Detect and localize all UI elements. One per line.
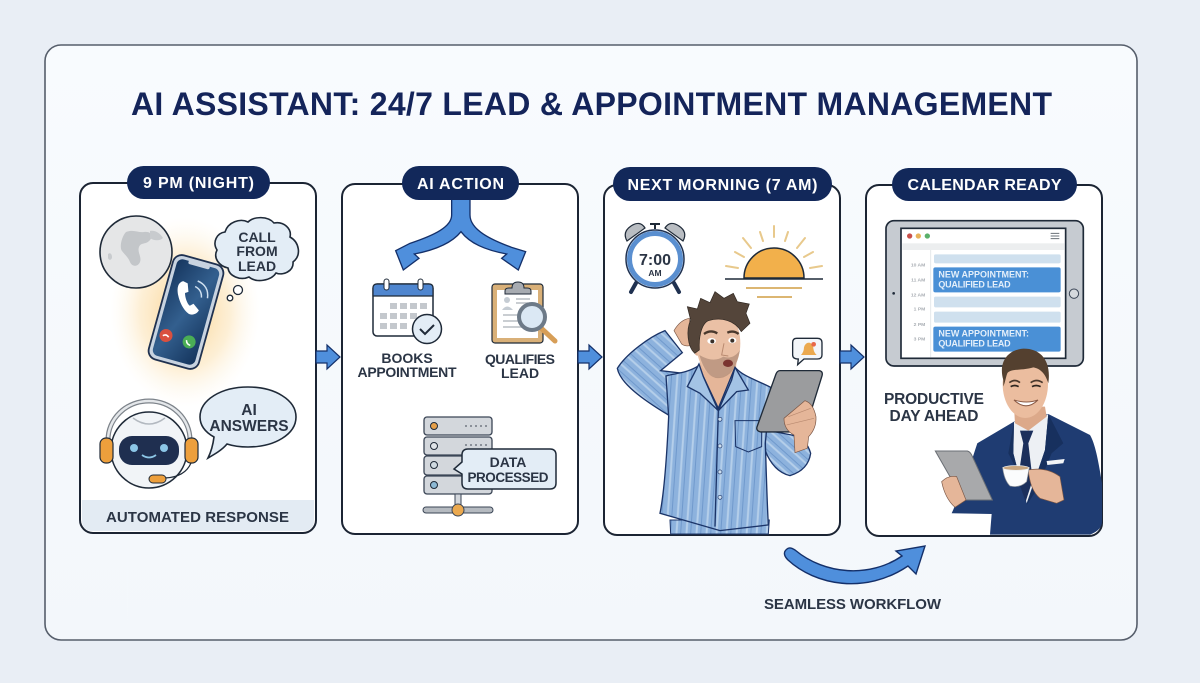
icon: smartphone [147,253,225,371]
footer band: automated response: AUTOMATED RESPONSE [106,509,289,526]
head [1003,350,1048,418]
face [1009,380,1043,406]
ears [694,341,701,356]
pill heading: calendar ready: CALENDAR READY [908,177,1062,194]
arrow: step 2 to 3 [578,345,602,369]
label: qualifies lead: LEAD [501,365,539,381]
label: productive day ahead: PRODUCTIVE [884,391,984,408]
callout: call from lead: CALL [238,229,276,245]
illustration: tablet calendar [886,221,1083,366]
footer band: automated response [82,500,314,531]
hair [1002,349,1049,387]
illustration: tablet calendar: 11 AM [911,277,925,283]
icon: robot with headset [100,401,198,488]
cup [1003,467,1029,487]
illustration: tablet calendar: NEW APPOINTMENT: [938,329,1029,339]
right arm [765,430,811,476]
notification bubble [793,338,822,365]
tie [1018,431,1033,502]
label: productive day ahead [884,391,984,425]
suit [952,414,1102,535]
tablet hand [942,476,966,507]
title: AI ASSISTANT: 24/7 LEAD & APPOINTMENT MANAGEMENT [131,86,1052,122]
arrow: step 1 to 2 [316,345,340,369]
cup hand arm [1028,469,1064,503]
trousers [670,520,769,534]
arrow: step 3 to 4 [840,345,864,369]
label: books appointment: APPOINTMENT [358,364,457,380]
lapels [1008,414,1063,505]
illustration: tablet calendar: 1 PM [914,307,925,313]
main card [45,45,1137,640]
neck [1014,407,1047,431]
label: qualifies lead [485,351,555,381]
icon: phone glow [110,217,260,407]
icon: sunrise [725,226,823,297]
illustration: tablet calendar: NEW APPOINTMENT: [938,270,1029,280]
pill heading: AI action: AI ACTION [417,176,504,193]
panel: calendar ready [866,168,1102,536]
pocket [735,421,762,452]
callout: call from lead: FROM [236,243,278,259]
placket [715,411,718,527]
illustration: tablet calendar: 2 PM [914,322,925,328]
pill heading: 9 PM (night) [127,166,270,199]
callout: AI answers [200,387,296,458]
icon: clipboard with magnifier [492,282,555,343]
callout: data processed: PROCESSED [468,470,549,485]
tablet [935,451,992,500]
panel: 9 PM night [80,166,316,533]
shirt and collar [1013,414,1048,503]
arrow: branching action arrow [396,198,526,270]
icon: alarm clock [625,223,685,292]
callout: data processed [454,449,556,489]
illustration: smiling businessman [935,349,1102,535]
tablet [757,371,822,432]
pill heading: next morning: NEXT MORNING (7 AM) [628,177,818,194]
illustration: surprised man in pajamas [617,292,822,534]
holding hand [784,401,816,453]
illustration: tablet calendar: QUALIFIED LEAD [938,280,1011,290]
callout: call from lead [215,218,298,301]
arrow: seamless workflow curve [784,546,925,584]
collar [687,364,748,411]
hair [687,292,750,353]
shirt body [660,366,771,531]
illustration: tablet calendar: 3 PM [914,337,925,343]
callout: AI answers: AI [241,402,257,419]
callout: AI answers: ANSWERS [209,418,289,435]
illustration: tablet calendar: 10 AM [911,263,925,269]
label: books appointment [358,350,457,380]
pocket square [1047,459,1065,465]
icon: alarm clock: 7:00 [639,252,671,269]
head [696,309,740,377]
pill heading: calendar ready [892,168,1077,201]
icon: calendar with check [373,279,442,344]
panel: AI action [342,166,578,534]
raised hand [674,318,693,346]
label: qualifies lead: QUALIFIES [485,351,555,367]
pill heading: AI action [402,166,519,200]
illustration: tablet calendar: QUALIFIED LEAD [938,339,1011,349]
icon: alarm clock: AM [648,268,662,278]
callout: call from lead: LEAD [238,258,276,274]
label: seamless workflow: SEAMLESS WORKFLOW [764,596,942,613]
icon: moon [100,216,172,288]
pill heading: 9 PM (night): 9 PM (NIGHT) [143,175,254,192]
icon: server stack [423,417,493,516]
panel: next morning [604,167,840,535]
neck [700,357,737,408]
face [704,331,739,367]
illustration: tablet calendar: 12 AM [911,292,925,298]
pill heading: next morning [613,167,832,201]
raised arm [617,331,683,415]
label: productive day ahead: DAY AHEAD [890,408,978,425]
callout: data processed: DATA [490,454,526,470]
label: books appointment: BOOKS [381,350,433,366]
